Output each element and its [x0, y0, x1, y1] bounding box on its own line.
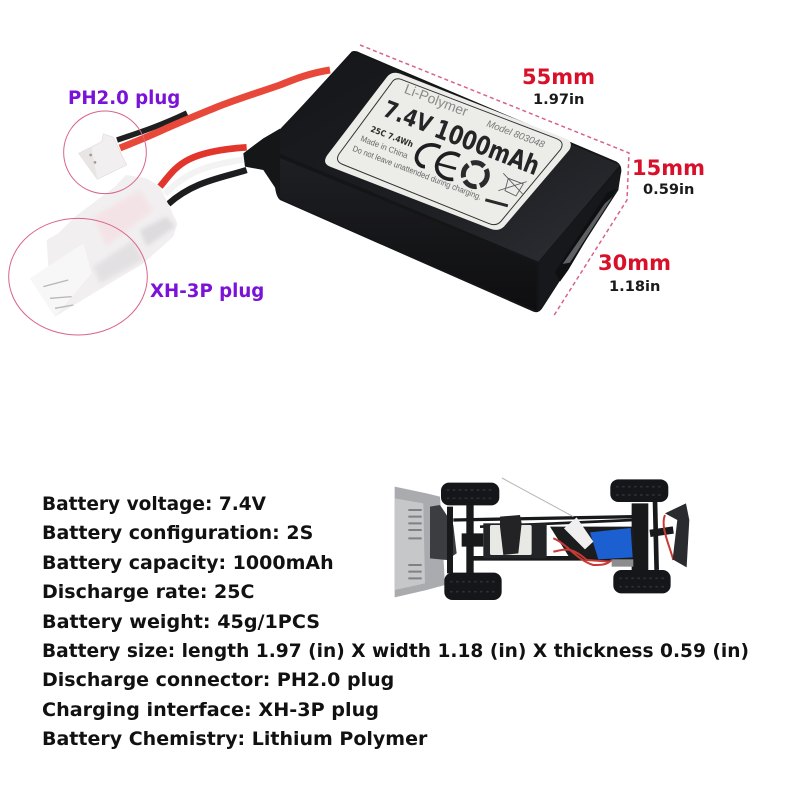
battery label: 1000mAh — [430, 115, 544, 182]
XH-3P connector — [30, 175, 177, 317]
battery label: 25C 7.4Wh — [369, 124, 415, 149]
PH2.0 connector — [79, 134, 127, 179]
grey module — [612, 559, 633, 567]
thickness dimension: 15mm — [632, 156, 705, 180]
width dimension — [598, 251, 671, 295]
spec: configuration: Battery configuration: 2S — [42, 522, 313, 544]
spec: weight: Battery weight: 45g/1PCS — [42, 611, 320, 633]
RC car chassis photo — [395, 478, 689, 600]
battery on chassis — [483, 515, 547, 558]
highlight circle: PH2.0 — [64, 111, 146, 194]
thickness dimension — [632, 156, 705, 198]
thickness dimension: 0.59in — [643, 181, 694, 198]
wheels — [441, 479, 671, 600]
plugs and wires — [9, 111, 280, 335]
length dimension — [522, 65, 595, 108]
plug label: PH2.0: PH2.0 plug — [68, 88, 180, 109]
length dimension: 55mm — [522, 65, 595, 89]
spec: discharge connector: Discharge connector: PH2.0 plug — [42, 669, 394, 691]
wheel tread — [447, 487, 665, 592]
antenna — [502, 478, 573, 517]
spec: charging interface: Charging interface: XH-3P plug — [42, 699, 379, 721]
upper wire pair — [117, 70, 330, 148]
bin icon — [498, 173, 527, 196]
length dimension: 1.97in — [533, 91, 584, 108]
silver body — [395, 487, 457, 597]
battery label: 7.4V — [380, 95, 436, 139]
battery label — [325, 73, 571, 230]
spec: size: Battery size: length 1.97 (in) X width 1.18 (in) X thickness 0.59 (in) — [42, 640, 749, 662]
dimension dashed lines — [360, 45, 629, 317]
white connector — [564, 517, 593, 549]
battery body — [263, 51, 621, 312]
spec: voltage: Battery voltage: 7.4V — [42, 493, 266, 515]
CE mark — [416, 145, 460, 179]
battery label: Do not leave unattended during charging. — [351, 143, 483, 202]
highlight circle: XH-3P — [9, 218, 147, 335]
blue ESC board — [590, 528, 633, 559]
width dimension: 30mm — [598, 251, 671, 275]
rear bumper — [665, 503, 689, 567]
battery photo — [263, 51, 621, 312]
spec: chemistry: Battery Chemistry: Lithium Polymer — [42, 728, 428, 750]
width dimension: 1.18in — [609, 278, 660, 295]
battery label: Li-Polymer — [402, 81, 471, 120]
spec: discharge rate: Discharge rate: 25C — [42, 581, 254, 603]
red wires — [553, 515, 673, 565]
chassis rails — [450, 500, 673, 573]
XH-3P wires — [160, 129, 280, 204]
battery label: Model 803048 — [485, 119, 547, 151]
spec: capacity: Battery capacity: 1000mAh — [42, 552, 334, 574]
battery label: Made in China — [359, 133, 410, 161]
plug label: XH-3P: XH-3P plug — [150, 281, 264, 302]
recycle icon — [463, 163, 487, 187]
battery specifications — [42, 493, 749, 750]
